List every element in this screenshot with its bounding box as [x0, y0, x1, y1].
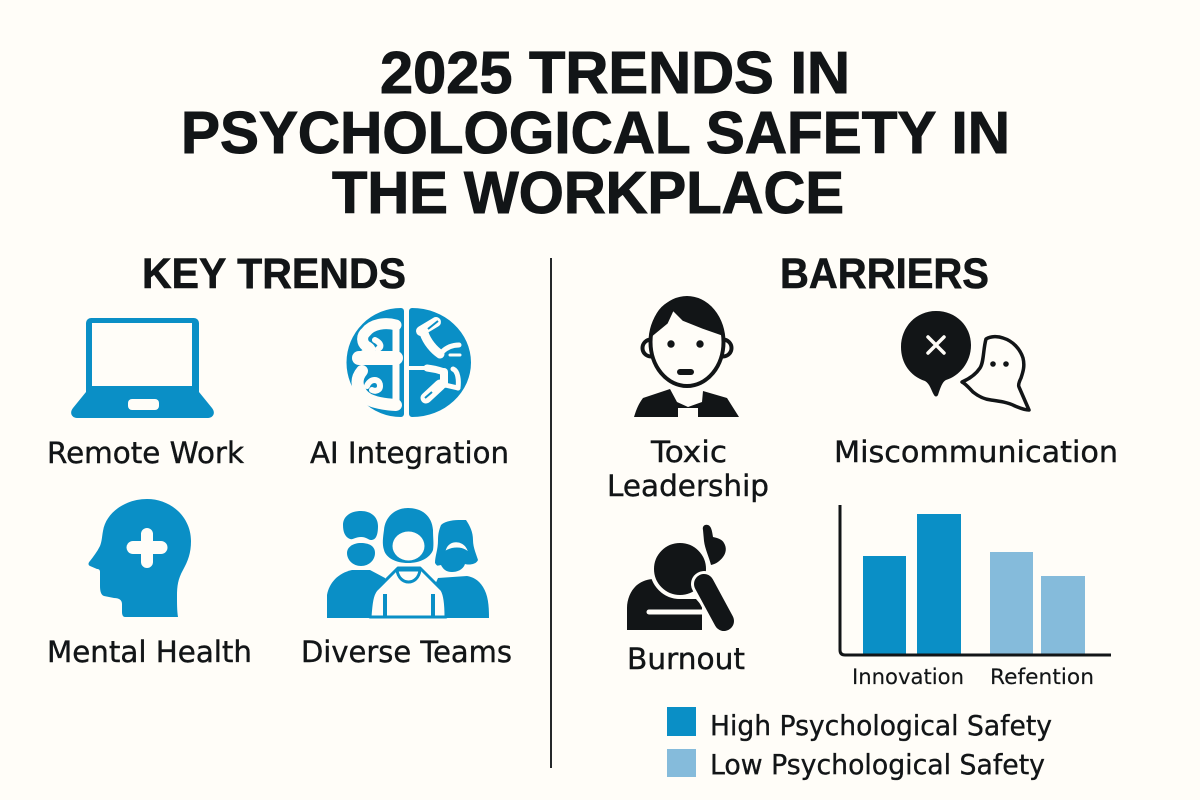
- icon: group of people: [327, 508, 489, 618]
- bar chart: [840, 505, 1111, 690]
- title: PSYCHOLOGICAL SAFETY IN: [181, 100, 1010, 166]
- label: miscommunication: Miscommunication: [834, 435, 1118, 469]
- axis label: innovation: Innovation: [852, 665, 964, 690]
- legend swatch: high: [667, 707, 696, 736]
- legend label: high: High Psychological Safety: [710, 710, 1052, 742]
- bar: retention low 2: [1041, 576, 1085, 655]
- icon: head with plus: [88, 499, 191, 617]
- item: toxic leadership: [607, 298, 769, 503]
- title: 2025 TRENDS IN: [380, 40, 850, 106]
- icon: brain: [346, 308, 471, 417]
- bar: retention low 1: [990, 552, 1033, 655]
- bar: innovation high 2: [917, 514, 961, 655]
- label: ai integration: AI Integration: [310, 436, 509, 470]
- title: THE WORKPLACE: [332, 160, 844, 226]
- legend swatch: low: [667, 749, 696, 777]
- label: toxic leadership: [607, 435, 769, 503]
- heading: barriers: BARRIERS: [780, 250, 989, 298]
- legend label: low: Low Psychological Safety: [710, 749, 1045, 781]
- item: diverse teams: [301, 508, 512, 669]
- item: miscommunication: [834, 311, 1118, 469]
- legend: [667, 707, 1052, 781]
- icon: person with head in hand: [627, 525, 726, 630]
- title: [181, 40, 1010, 226]
- icon: laptop: [71, 318, 214, 418]
- panel: key trends: [47, 250, 512, 669]
- label: diverse teams: Diverse Teams: [301, 635, 512, 669]
- bar: innovation high 1: [863, 556, 906, 655]
- panel: barriers: [607, 250, 1118, 781]
- icon: person: [634, 298, 739, 417]
- label: burnout: Burnout: [627, 642, 745, 676]
- icon: speech bubbles: [901, 311, 1029, 410]
- item: burnout: [627, 525, 745, 676]
- heading: key trends: KEY TRENDS: [142, 250, 406, 298]
- axis label: retention: Refention: [990, 665, 1094, 690]
- label: mental health: Mental Health: [47, 635, 252, 669]
- axes: [840, 505, 1111, 655]
- label: toxic leadership: Leadership: [607, 469, 769, 503]
- item: ai integration: [310, 308, 509, 470]
- item: mental health: [47, 499, 252, 669]
- item: remote work: [47, 318, 244, 470]
- label: remote work: Remote Work: [47, 436, 244, 470]
- label: toxic leadership: Toxic: [650, 435, 727, 469]
